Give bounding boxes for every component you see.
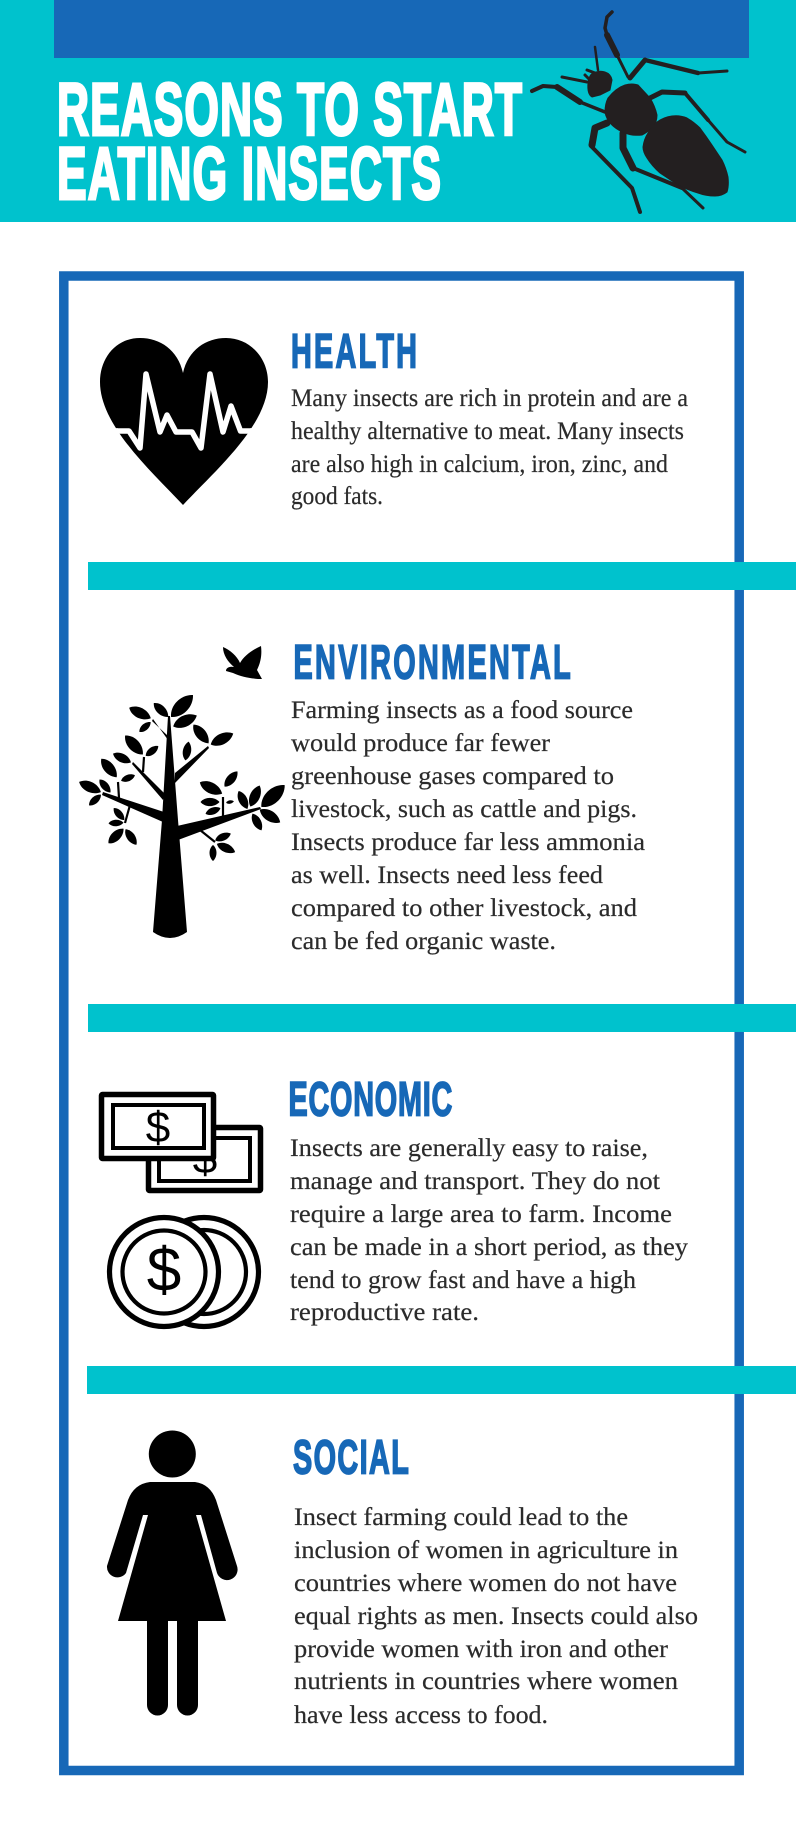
text: environmental body: Farming insects as a food source (291, 697, 633, 724)
text: health body: healthy alternative to meat. Many insects (291, 418, 684, 445)
text: environmental body: as well. Insects need less feed (291, 862, 604, 889)
header banner (0, 0, 796, 222)
icon: banknotes: $ (193, 1134, 217, 1183)
icon: coins (110, 1218, 258, 1326)
text: social body: Insect farming could lead to the (294, 1504, 628, 1531)
text: social body: countries where women do not have (294, 1570, 677, 1597)
text: environmental body: can be fed organic waste. (291, 928, 556, 955)
text: environmental body: livestock, such as cattle and pigs. (291, 796, 637, 823)
text: health body: are also high in calcium, iron, zinc, and (291, 451, 668, 478)
teal divider 3 (87, 1366, 796, 1394)
icon: ant silhouette (532, 12, 745, 212)
text: economic body: require a large area to farm. Income (290, 1201, 672, 1228)
heading: economic: ECONOMIC (288, 1073, 452, 1126)
text: health body (291, 385, 688, 510)
text: health body: good fats. (291, 483, 383, 510)
text: social body (294, 1504, 698, 1729)
text: social body: provide women with iron and other (294, 1636, 669, 1663)
title: EATING INSECTS (57, 132, 441, 215)
blue content border (64, 276, 739, 1770)
text: health body: Many insects are rich in protein and are a (291, 385, 688, 412)
heading: health: HEALTH (291, 325, 417, 378)
text: environmental body: Insects produce far less ammonia (291, 829, 645, 856)
icon: heart with heartbeat (100, 338, 268, 505)
teal divider 1 (88, 562, 796, 590)
text: economic body: Insects are generally easy to raise, (290, 1135, 648, 1162)
text: social body: have less access to food. (294, 1702, 548, 1729)
text: economic body (290, 1135, 689, 1326)
text: environmental body: greenhouse gases compared to (291, 763, 614, 790)
text: environmental body: compared to other livestock, and (291, 895, 638, 922)
icon: woman figure (107, 1430, 238, 1716)
icon: banknotes (102, 1094, 260, 1190)
title: REASONS TO START (57, 68, 522, 151)
icon: tree (77, 690, 289, 938)
text: social body: equal rights as men. Insects could also (294, 1603, 698, 1630)
heading: environmental: ENVIRONMENTAL (294, 636, 571, 689)
text: environmental body: would produce far fewer (291, 730, 551, 757)
text: social body: nutrients in countries where women (294, 1668, 679, 1695)
icon: coins: $ (147, 1236, 181, 1305)
text: economic body: manage and transport. They do not (290, 1168, 660, 1195)
icon: banknotes: $ (146, 1103, 170, 1152)
teal divider 2 (88, 1004, 796, 1032)
text: environmental body (291, 697, 645, 955)
text: social body: inclusion of women in agriculture in (294, 1537, 679, 1564)
text: economic body: can be made in a short period, as they (290, 1234, 689, 1261)
text: economic body: reproductive rate. (290, 1299, 479, 1326)
title (57, 68, 522, 215)
icon: bird (223, 646, 262, 679)
text: economic body: tend to grow fast and have a high (290, 1267, 637, 1294)
heading: social: SOCIAL (293, 1431, 409, 1484)
